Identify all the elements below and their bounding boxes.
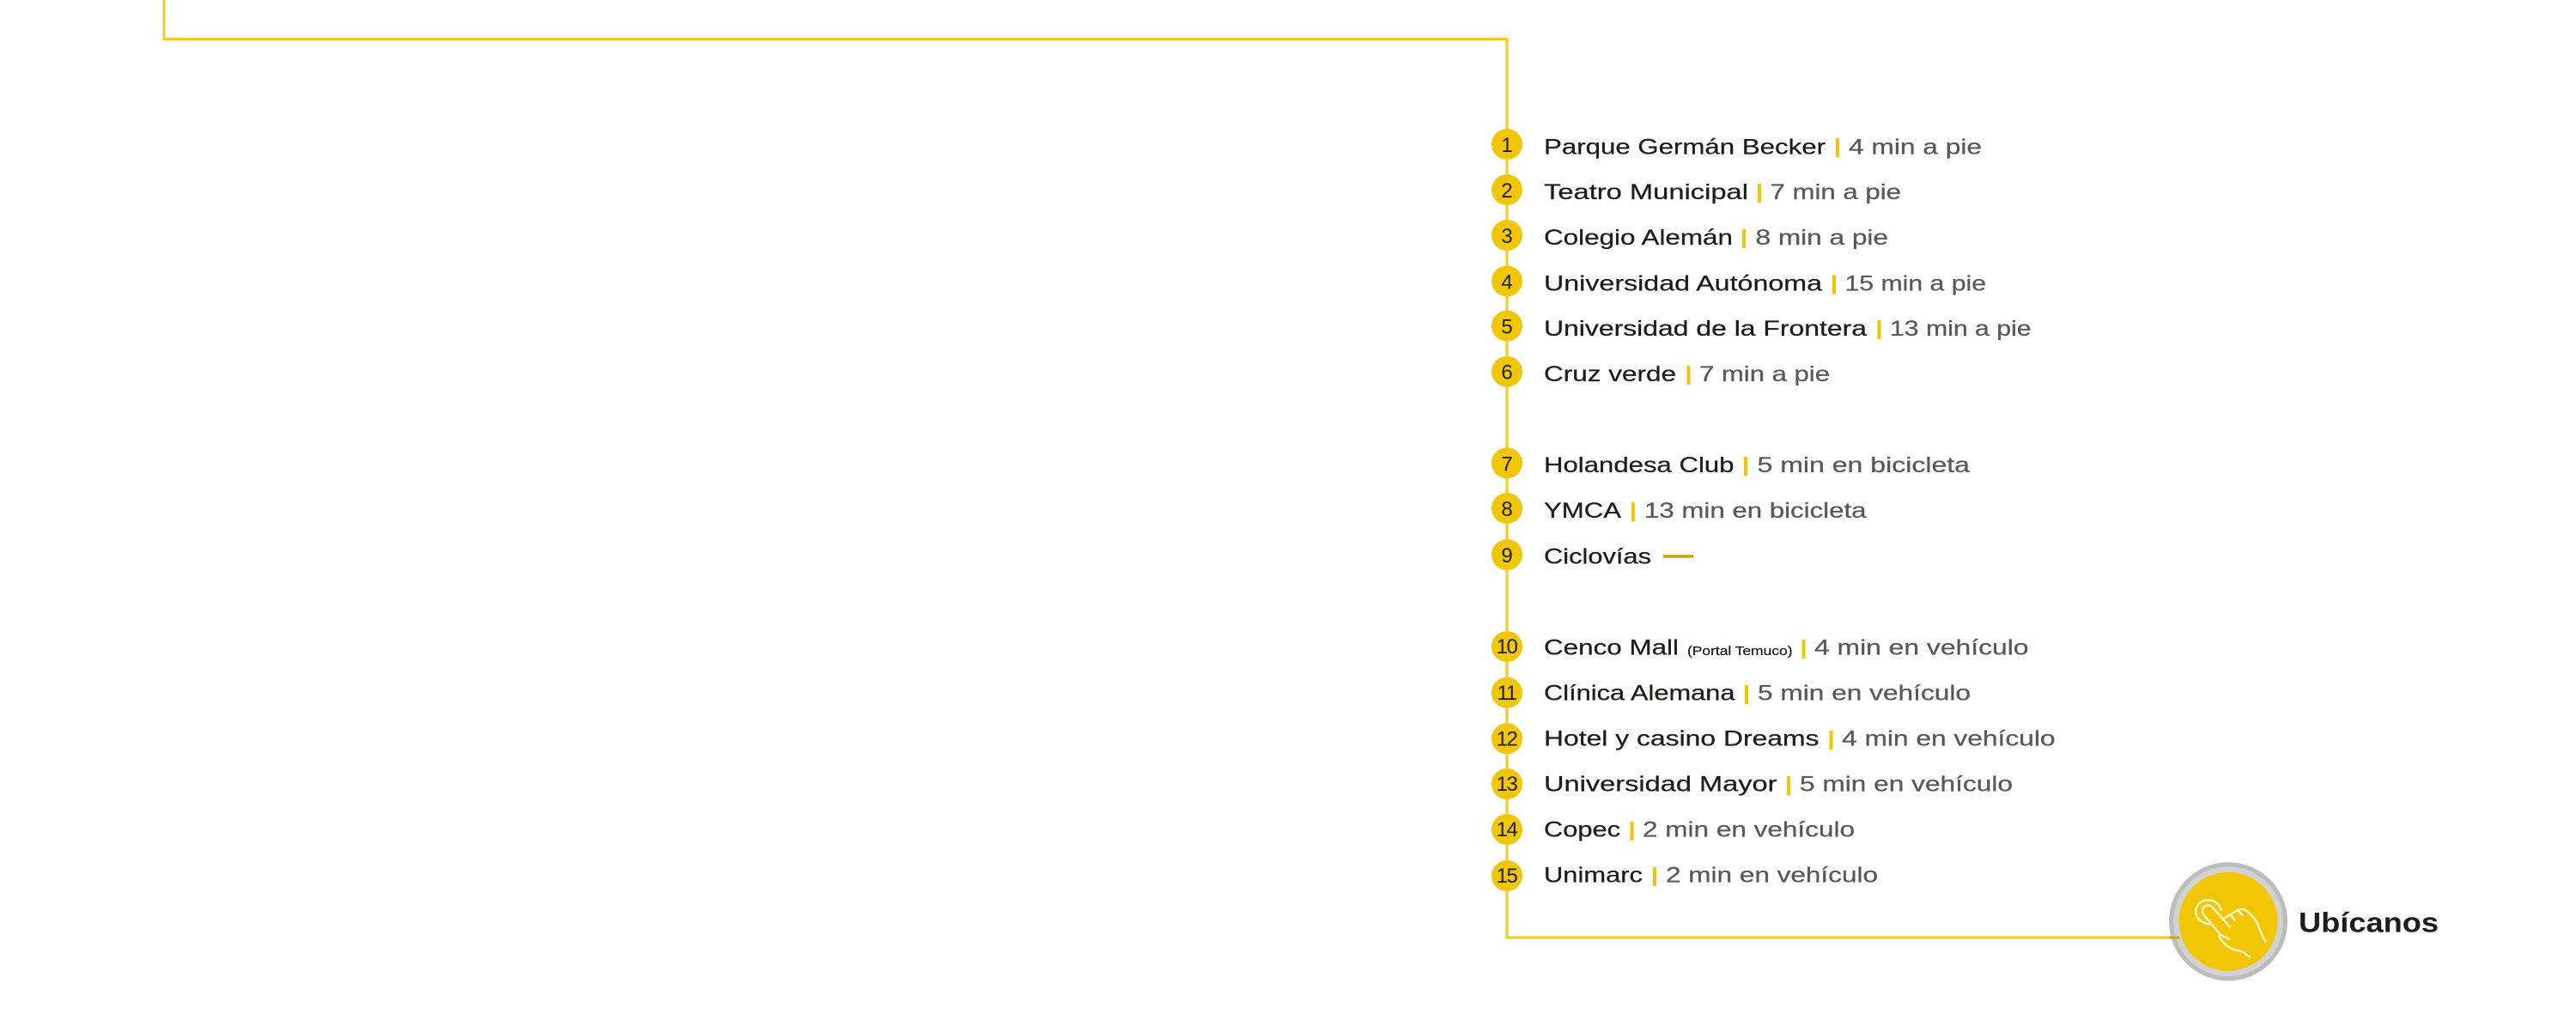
item 7: Holandesa Club: 5 min en bicicleta [1757,453,1970,477]
item 8: YMCA: 8 [1501,498,1513,521]
item 13: Universidad Mayor: 5 min en vehículo [1800,773,2013,797]
item 14: Copec: 2 min en vehículo [1643,817,1855,841]
item 6: Cruz verde: Cruz verde [1544,362,1676,386]
item 15: Unimarc: 2 min en vehículo [1666,864,1878,888]
item 9: Ciclovías with route swatch: 9 [1501,544,1513,568]
item 2: Teatro Municipal [1492,174,1901,205]
item 12: Hotel y casino Dreams: Hotel y casino Dreams [1544,726,1819,750]
item 10: Cenco Mall [1492,631,2028,662]
item 14: Copec: 14 [1497,818,1517,841]
item 3: Colegio Alemán: 8 min a pie [1755,226,1888,250]
item 12: Hotel y casino Dreams [1492,723,2056,754]
item 1: Parque Germán Becker: Parque Germán Becker [1544,136,1826,160]
item 15: Unimarc [1492,860,1878,891]
item 2: Teatro Municipal: 7 min a pie [1771,180,1901,204]
item 9: Ciclovías with route swatch [1492,539,1693,570]
item 1: Parque Germán Becker [1492,129,1982,160]
item 14: Copec: Copec [1544,817,1620,841]
connector line [164,0,2182,938]
icon: pointing hand [2196,900,2266,957]
item 9: Ciclovías with route swatch: Ciclovías [1544,545,1651,569]
item 8: YMCA: YMCA [1544,499,1621,523]
item 5: Universidad de la Frontera: 13 min a pie [1890,317,2032,341]
icon: tap button [2169,862,2287,981]
item 13: Universidad Mayor: Universidad Mayor [1544,773,1777,797]
item 3: Colegio Alemán: Colegio Alemán [1544,226,1733,250]
item 11: Clínica Alemana: 5 min en vehículo [1758,682,1971,706]
item 11: Clínica Alemana [1492,677,1971,708]
item 5: Universidad de la Frontera [1492,311,2032,342]
item 11: Clínica Alemana: Clínica Alemana [1544,682,1735,706]
item 5: Universidad de la Frontera: 5 [1501,316,1513,338]
item 7: Holandesa Club: Holandesa Club [1544,453,1735,477]
item 14: Copec [1492,814,1855,845]
item 5: Universidad de la Frontera: Universidad de la Frontera [1544,317,1867,341]
item 2: Teatro Municipal: 2 [1501,179,1513,203]
item 4: Universidad Autónoma [1492,266,1986,297]
item 6: Cruz verde: 6 [1501,361,1513,385]
item 8: YMCA: 13 min en bicicleta [1644,499,1867,523]
item 4: Universidad Autónoma: 15 min a pie [1844,271,1986,295]
group: driving destinations [1492,631,2056,891]
group: walking destinations [1492,129,2032,387]
item 12: Hotel y casino Dreams: 12 [1497,728,1517,750]
call to action label: Ubícanos [2299,907,2439,938]
item 10: Cenco Mall: (Portal Temuco) [1687,644,1793,659]
item 7: Holandesa Club: 7 [1501,452,1513,476]
item 15: Unimarc: 15 [1497,865,1517,888]
item 10: Cenco Mall: Cenco Mall [1544,636,1679,660]
item 7: Holandesa Club [1492,447,1970,478]
item 10: Cenco Mall: 10 [1497,635,1517,659]
item 1: Parque Germán Becker: 4 min a pie [1849,136,1982,160]
item 15: Unimarc: Unimarc [1544,864,1643,888]
item 1: Parque Germán Becker: 1 [1501,134,1513,157]
item 4: Universidad Autónoma: 4 [1501,271,1513,294]
group: cycling destinations [1492,447,1970,570]
item 2: Teatro Municipal: Teatro Municipal [1544,180,1748,204]
item 13: Universidad Mayor: 13 [1497,773,1517,796]
item 10: Cenco Mall: 4 min en vehículo [1814,636,2028,660]
item 4: Universidad Autónoma: Universidad Autónoma [1544,271,1822,295]
item 12: Hotel y casino Dreams: 4 min en vehículo [1842,726,2056,750]
item 6: Cruz verde [1492,356,1830,387]
item 8: YMCA [1492,493,1867,524]
item 6: Cruz verde: 7 min a pie [1699,362,1830,386]
item 3: Colegio Alemán [1492,220,1888,251]
item 11: Clínica Alemana: 11 [1498,682,1517,705]
item 3: Colegio Alemán: 3 [1501,225,1513,248]
item 13: Universidad Mayor [1492,768,2013,799]
